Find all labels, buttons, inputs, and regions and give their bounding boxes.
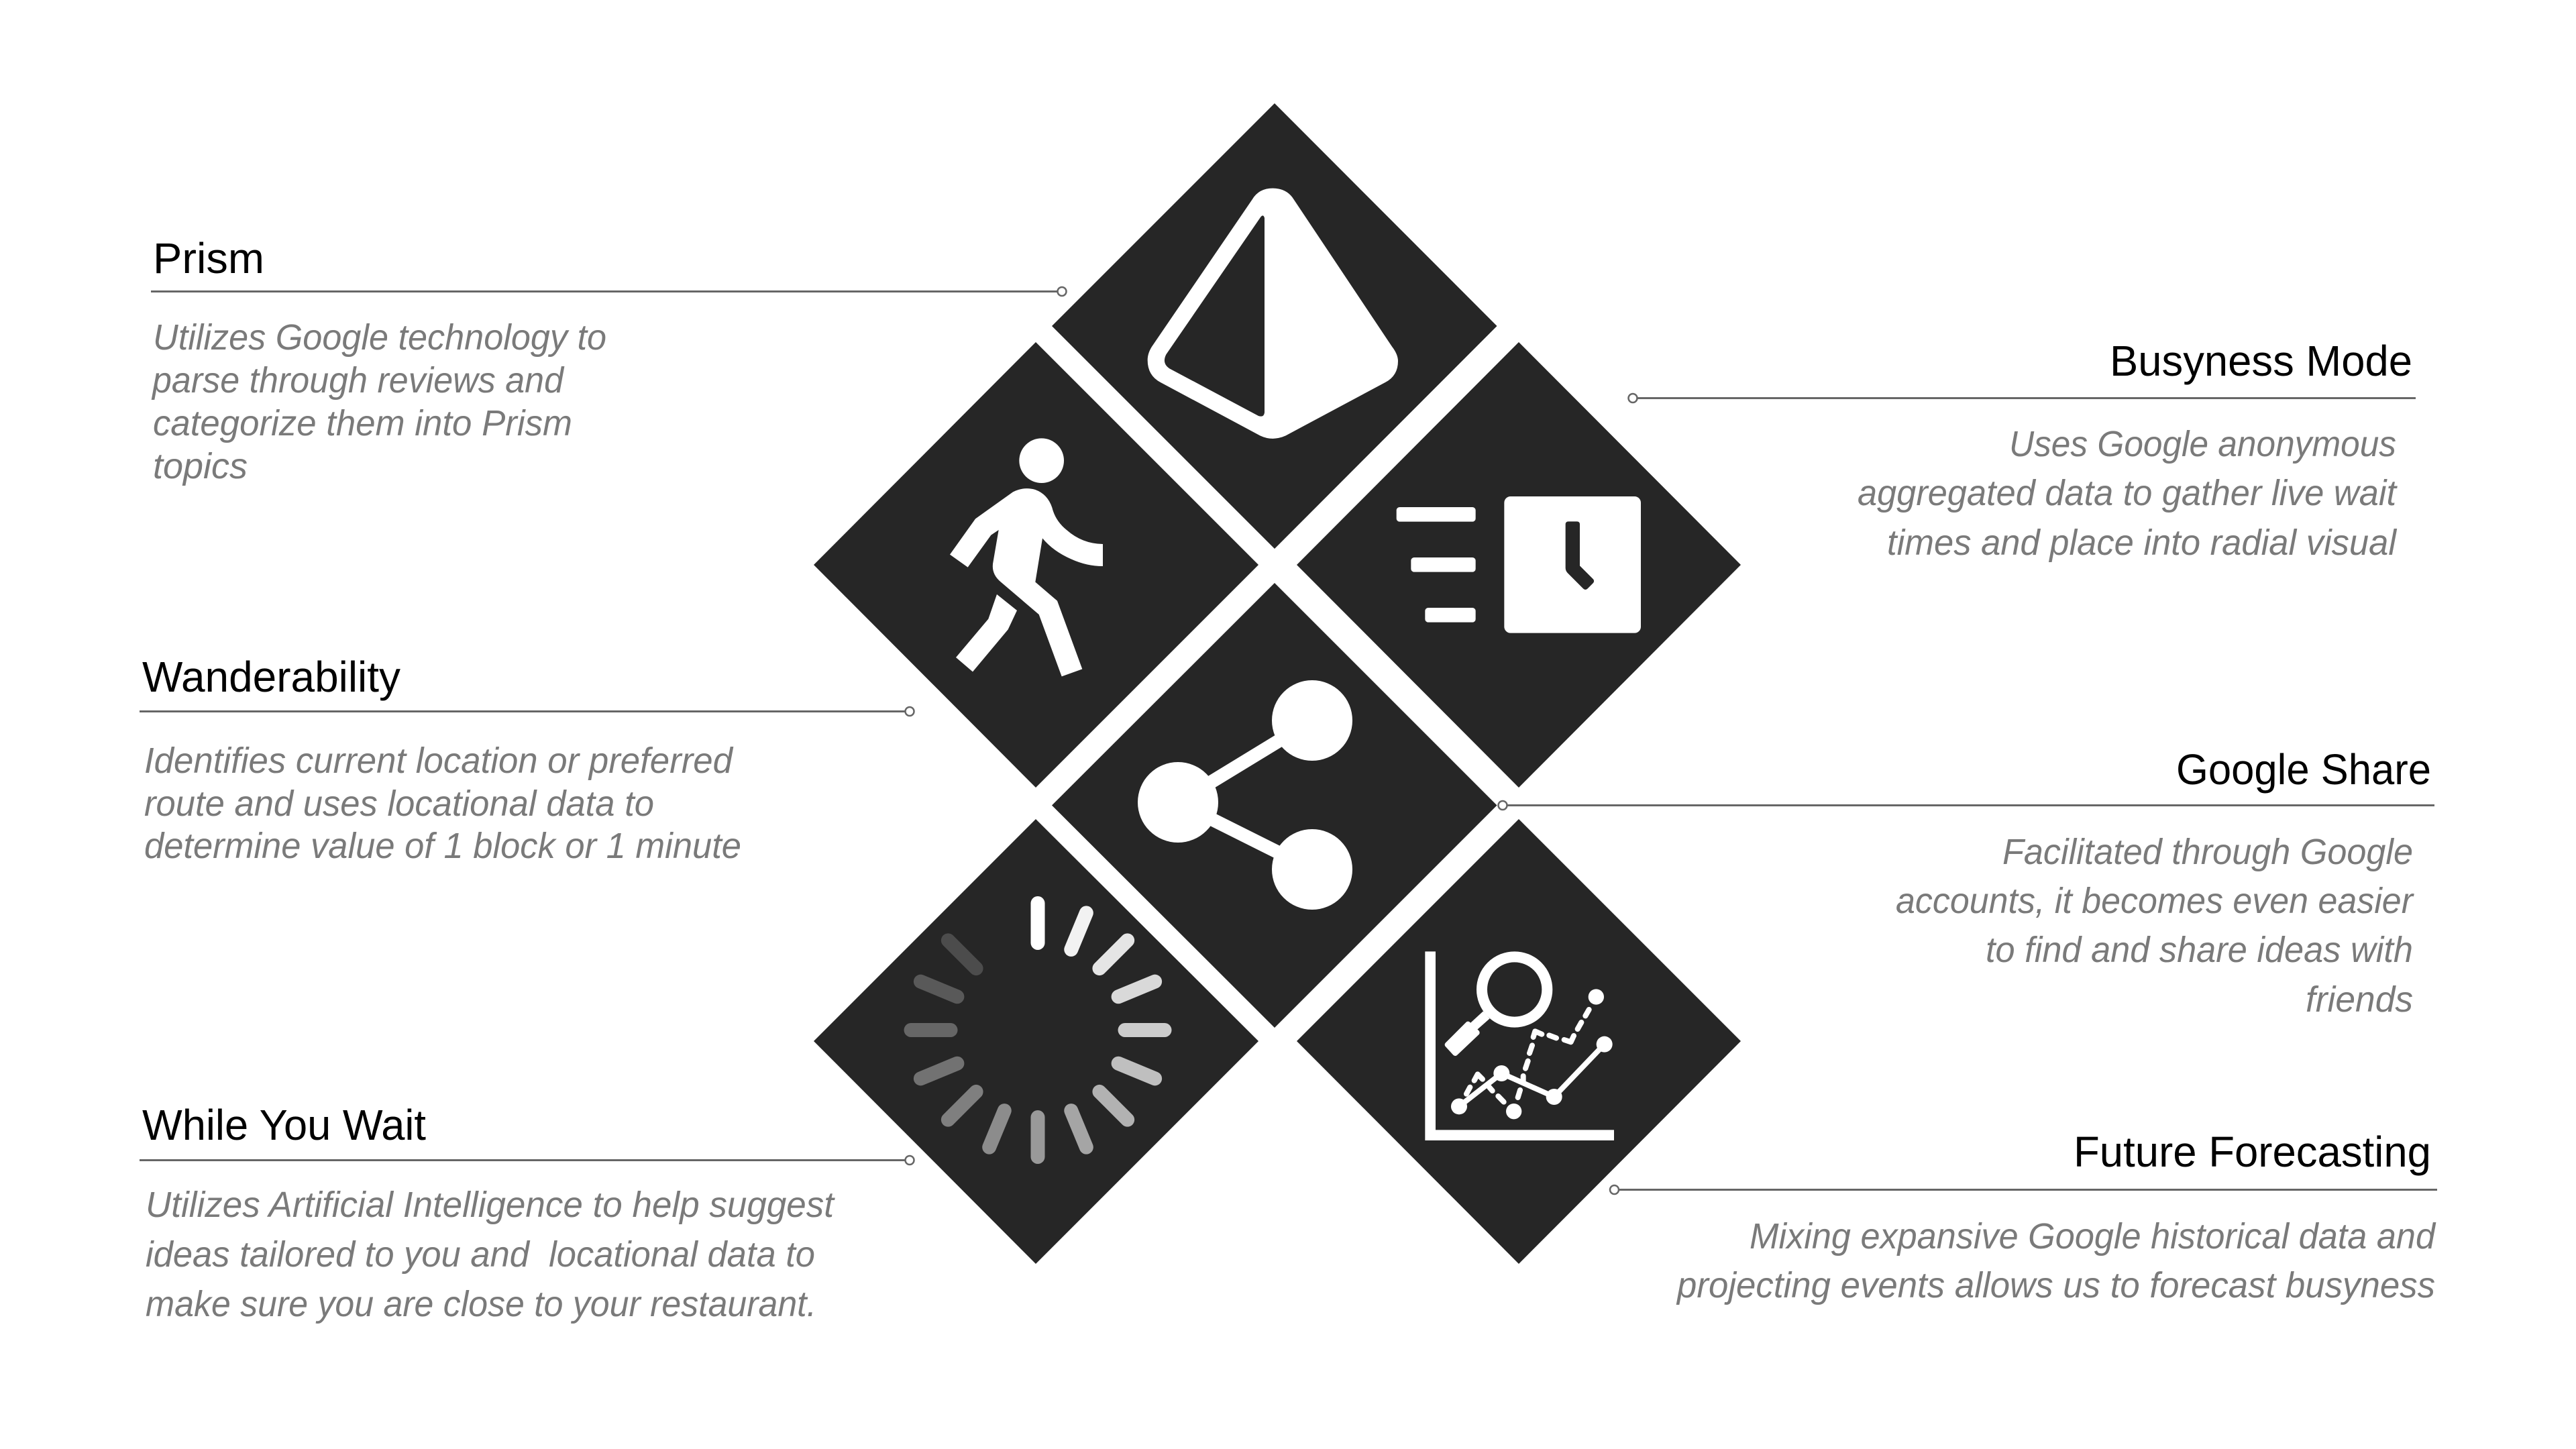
text block: Prism description: Utilizes Google technology to (153, 317, 606, 358)
text block: Future Forecasting description: projecting events allows us to forecast busyness (1676, 1265, 2435, 1305)
callout: Wanderability (140, 653, 914, 866)
heading: While You Wait: While You Wait (142, 1101, 426, 1149)
text block: Prism description: topics (153, 446, 248, 486)
text block: Wanderability description: determine value of 1 block or 1 minute (144, 826, 741, 866)
text block: Google Share description: Facilitated through Google (2002, 832, 2413, 872)
callout: While You Wait (140, 1101, 914, 1324)
text block: Prism description: parse through reviews and (151, 360, 565, 400)
panel: Prism diamond (1052, 103, 1497, 549)
panel: Busyness Mode diamond (1297, 342, 1741, 788)
icon: prism (1148, 189, 1398, 439)
icon: clock with speed bars (1397, 496, 1641, 633)
panel: Google Share diamond (1052, 583, 1497, 1028)
callout: Google Share (1499, 745, 2434, 1020)
panel: Wanderability diamond (814, 342, 1258, 788)
text block: Google Share description: to find and share ideas with (1986, 930, 2413, 970)
text block: Busyness Mode description (1858, 424, 2398, 563)
text block: While You Wait description (146, 1185, 835, 1324)
panel: Future Forecasting diamond (1297, 819, 1741, 1264)
icon: loading spinner (911, 903, 1165, 1157)
text block: While You Wait description: Utilizes Artificial Intelligence to help suggest (146, 1185, 835, 1225)
text block: Wanderability description: Identifies current location or preferred (144, 741, 734, 781)
text block: Wanderability description (144, 741, 741, 866)
text block: Busyness Mode description: times and place into radial visual (1887, 523, 2398, 563)
icon: share nodes (1138, 680, 1352, 910)
text block: While You Wait description: ideas tailored to you and locational data to (146, 1234, 815, 1275)
text block: Busyness Mode description: Uses Google anonymous (2009, 424, 2396, 464)
heading: Wanderability: Wanderability (142, 653, 400, 701)
text block: Future Forecasting description (1676, 1216, 2436, 1305)
heading: Google Share: Google Share (2176, 745, 2431, 794)
icon: forecast chart with magnifier (1425, 951, 1614, 1140)
callout: Prism (151, 234, 1067, 486)
text block: Busyness Mode description: aggregated data to gather live wait (1858, 473, 2398, 513)
text block: Google Share description: accounts, it becomes even easier (1896, 881, 2414, 921)
text block: Wanderability description: route and uses locational data to (144, 784, 654, 824)
heading: Prism: Prism (153, 234, 264, 282)
text block: Prism description: categorize them into Prism (153, 403, 572, 443)
heading: Busyness Mode: Busyness Mode (2110, 337, 2412, 385)
callout: Busyness Mode (1629, 337, 2416, 563)
text block: Future Forecasting description: Mixing expansive Google historical data and (1750, 1216, 2436, 1256)
callout: Future Forecasting (1610, 1128, 2437, 1305)
icon: walking person (950, 438, 1103, 676)
text block: While You Wait description: make sure you are close to your restaurant. (146, 1284, 816, 1324)
text block: Google Share description: friends (2306, 979, 2413, 1020)
text block: Prism description (151, 317, 606, 486)
heading: Future Forecasting: Future Forecasting (2074, 1128, 2431, 1176)
text block: Google Share description (1896, 832, 2414, 1020)
panel: While You Wait diamond (814, 819, 1258, 1264)
